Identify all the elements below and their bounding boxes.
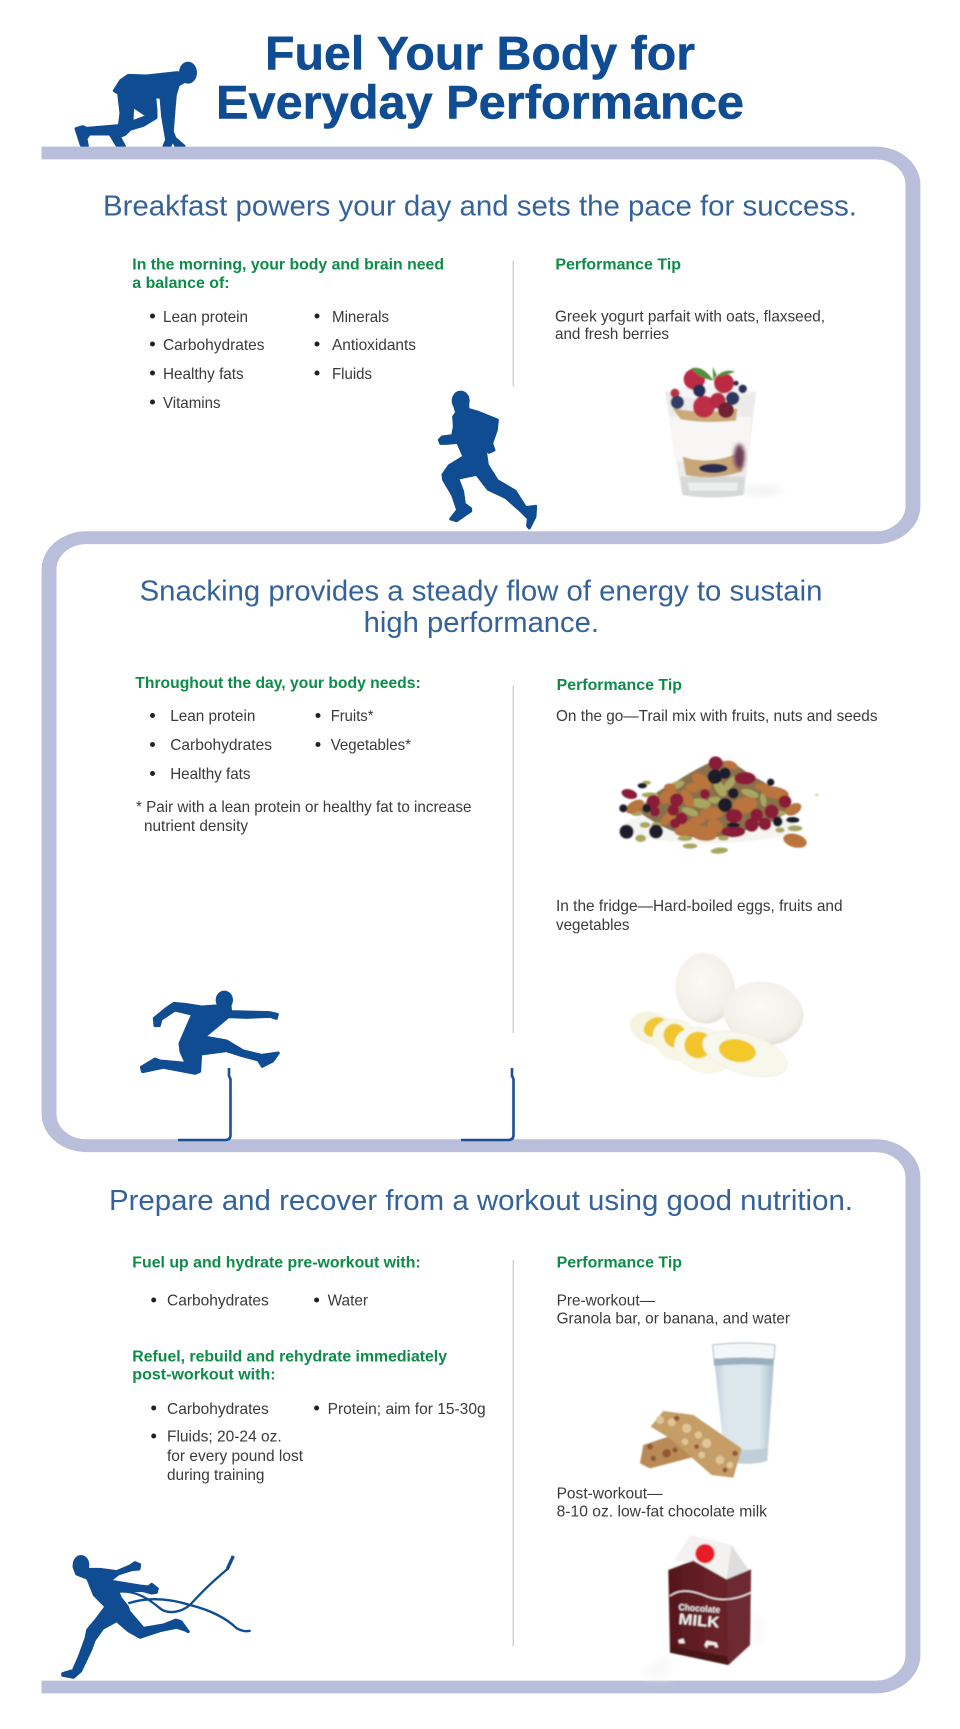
photo: granola bar and water xyxy=(640,1342,775,1478)
tip text: parfait: Greek yogurt parfait with oats, flaxseed, xyxy=(555,308,825,325)
tip text: post-workout: Post-workout— xyxy=(557,1486,663,1503)
icon: runner finishing through ribbon xyxy=(63,1555,251,1677)
icon: runner xyxy=(439,391,536,528)
panel: breakfast xyxy=(56,160,906,531)
post-workout list: for every pound lost xyxy=(167,1448,304,1465)
nutrient list: Fluids xyxy=(332,366,372,383)
icon: sprinter in starting crouch xyxy=(76,62,197,146)
nutrient list xyxy=(150,708,411,783)
tip text: pre-workout: Pre-workout— xyxy=(557,1293,655,1310)
nutrient list: Lean protein xyxy=(163,309,248,326)
title: Fuel Your Body for xyxy=(265,28,695,81)
photo: chocolate milk carton xyxy=(645,1535,762,1678)
performance tip heading: Performance Tip xyxy=(555,257,681,274)
subheading: morning balance: a balance of: xyxy=(132,275,230,292)
nutrient list: Minerals xyxy=(332,309,389,326)
subheading: post-workout: Refuel, rebuild and rehydrate immediately xyxy=(132,1348,447,1366)
pre-workout list: Water xyxy=(328,1293,369,1310)
footnote: * Pair with a lean protein or healthy fat to increase xyxy=(136,799,472,816)
footnote: nutrient density xyxy=(144,818,248,835)
tip text: parfait: and fresh berries xyxy=(555,326,669,343)
nutrient list: Healthy fats xyxy=(170,766,250,783)
post-workout list xyxy=(151,1401,486,1484)
tip text: pre-workout xyxy=(557,1293,791,1328)
post-workout list: Protein; aim for 15-30g xyxy=(328,1401,486,1418)
tip text: in the fridge: vegetables xyxy=(556,917,630,934)
tip text: in the fridge xyxy=(556,898,843,934)
panel: workout xyxy=(56,1152,906,1680)
subheading: post-workout: post-workout with: xyxy=(132,1366,276,1383)
post-workout list: during training xyxy=(167,1467,264,1484)
nutrient list: Carbohydrates xyxy=(170,737,272,754)
pre-workout list: Carbohydrates xyxy=(167,1293,269,1310)
nutrient list: Healthy fats xyxy=(163,366,244,383)
performance tip heading: Performance Tip xyxy=(557,1254,682,1272)
heading: breakfast: Breakfast powers your day and sets the pace for success. xyxy=(103,190,857,222)
tip text: on the go: On the go—Trail mix with fruits, nuts and seeds xyxy=(556,708,878,725)
photo: chocolate milk carton: MILK xyxy=(678,1611,720,1632)
photo: trail mix xyxy=(619,756,818,854)
subheading: pre-workout: Fuel up and hydrate pre-workout with: xyxy=(132,1254,421,1272)
photo: chocolate milk carton: Chocolate xyxy=(678,1602,720,1615)
tip text: post-workout xyxy=(557,1486,768,1520)
post-workout list: Fluids; 20-24 oz. xyxy=(167,1429,282,1446)
heading: snacking: Snacking provides a steady flow of energy to sustain xyxy=(140,575,822,607)
nutrient list: Fruits* xyxy=(331,708,374,725)
subheading: morning balance xyxy=(132,257,444,292)
nutrient list: Vegetables* xyxy=(331,737,411,754)
performance tip heading: Performance Tip xyxy=(557,677,682,694)
subheading: throughout the day: Throughout the day, your body needs: xyxy=(135,675,421,692)
photo: yogurt parfait xyxy=(665,367,783,497)
nutrient list: Carbohydrates xyxy=(163,337,264,354)
hurdle: near xyxy=(178,1068,230,1140)
nutrient list xyxy=(150,309,416,412)
title xyxy=(216,28,744,130)
tip text: parfait xyxy=(555,308,825,343)
nutrient list: Vitamins xyxy=(163,395,220,412)
nutrient list: Lean protein xyxy=(170,708,255,725)
pre-workout list xyxy=(151,1293,369,1310)
post-workout list: Carbohydrates xyxy=(167,1401,269,1418)
heading: snacking: high performance. xyxy=(364,607,599,639)
title: Everyday Performance xyxy=(216,77,744,130)
footnote xyxy=(136,799,472,835)
icon: hurdler xyxy=(141,991,278,1073)
tip text: post-workout: 8-10 oz. low-fat chocolate milk xyxy=(557,1504,768,1520)
panel: snacking xyxy=(56,544,906,1140)
tip text: pre-workout: Granola bar, or banana, and water xyxy=(557,1311,791,1328)
heading: snacking xyxy=(140,575,822,639)
subheading: morning balance: In the morning, your body and brain need xyxy=(132,257,444,274)
heading: workout: Prepare and recover from a workout using good nutrition. xyxy=(109,1185,853,1217)
hurdle: far xyxy=(461,1068,514,1140)
nutrient list: Antioxidants xyxy=(332,337,416,354)
photo: hard-boiled eggs xyxy=(625,951,807,1086)
subheading: post-workout xyxy=(132,1348,447,1383)
tip text: in the fridge: In the fridge—Hard-boiled eggs, fruits and xyxy=(556,898,843,915)
